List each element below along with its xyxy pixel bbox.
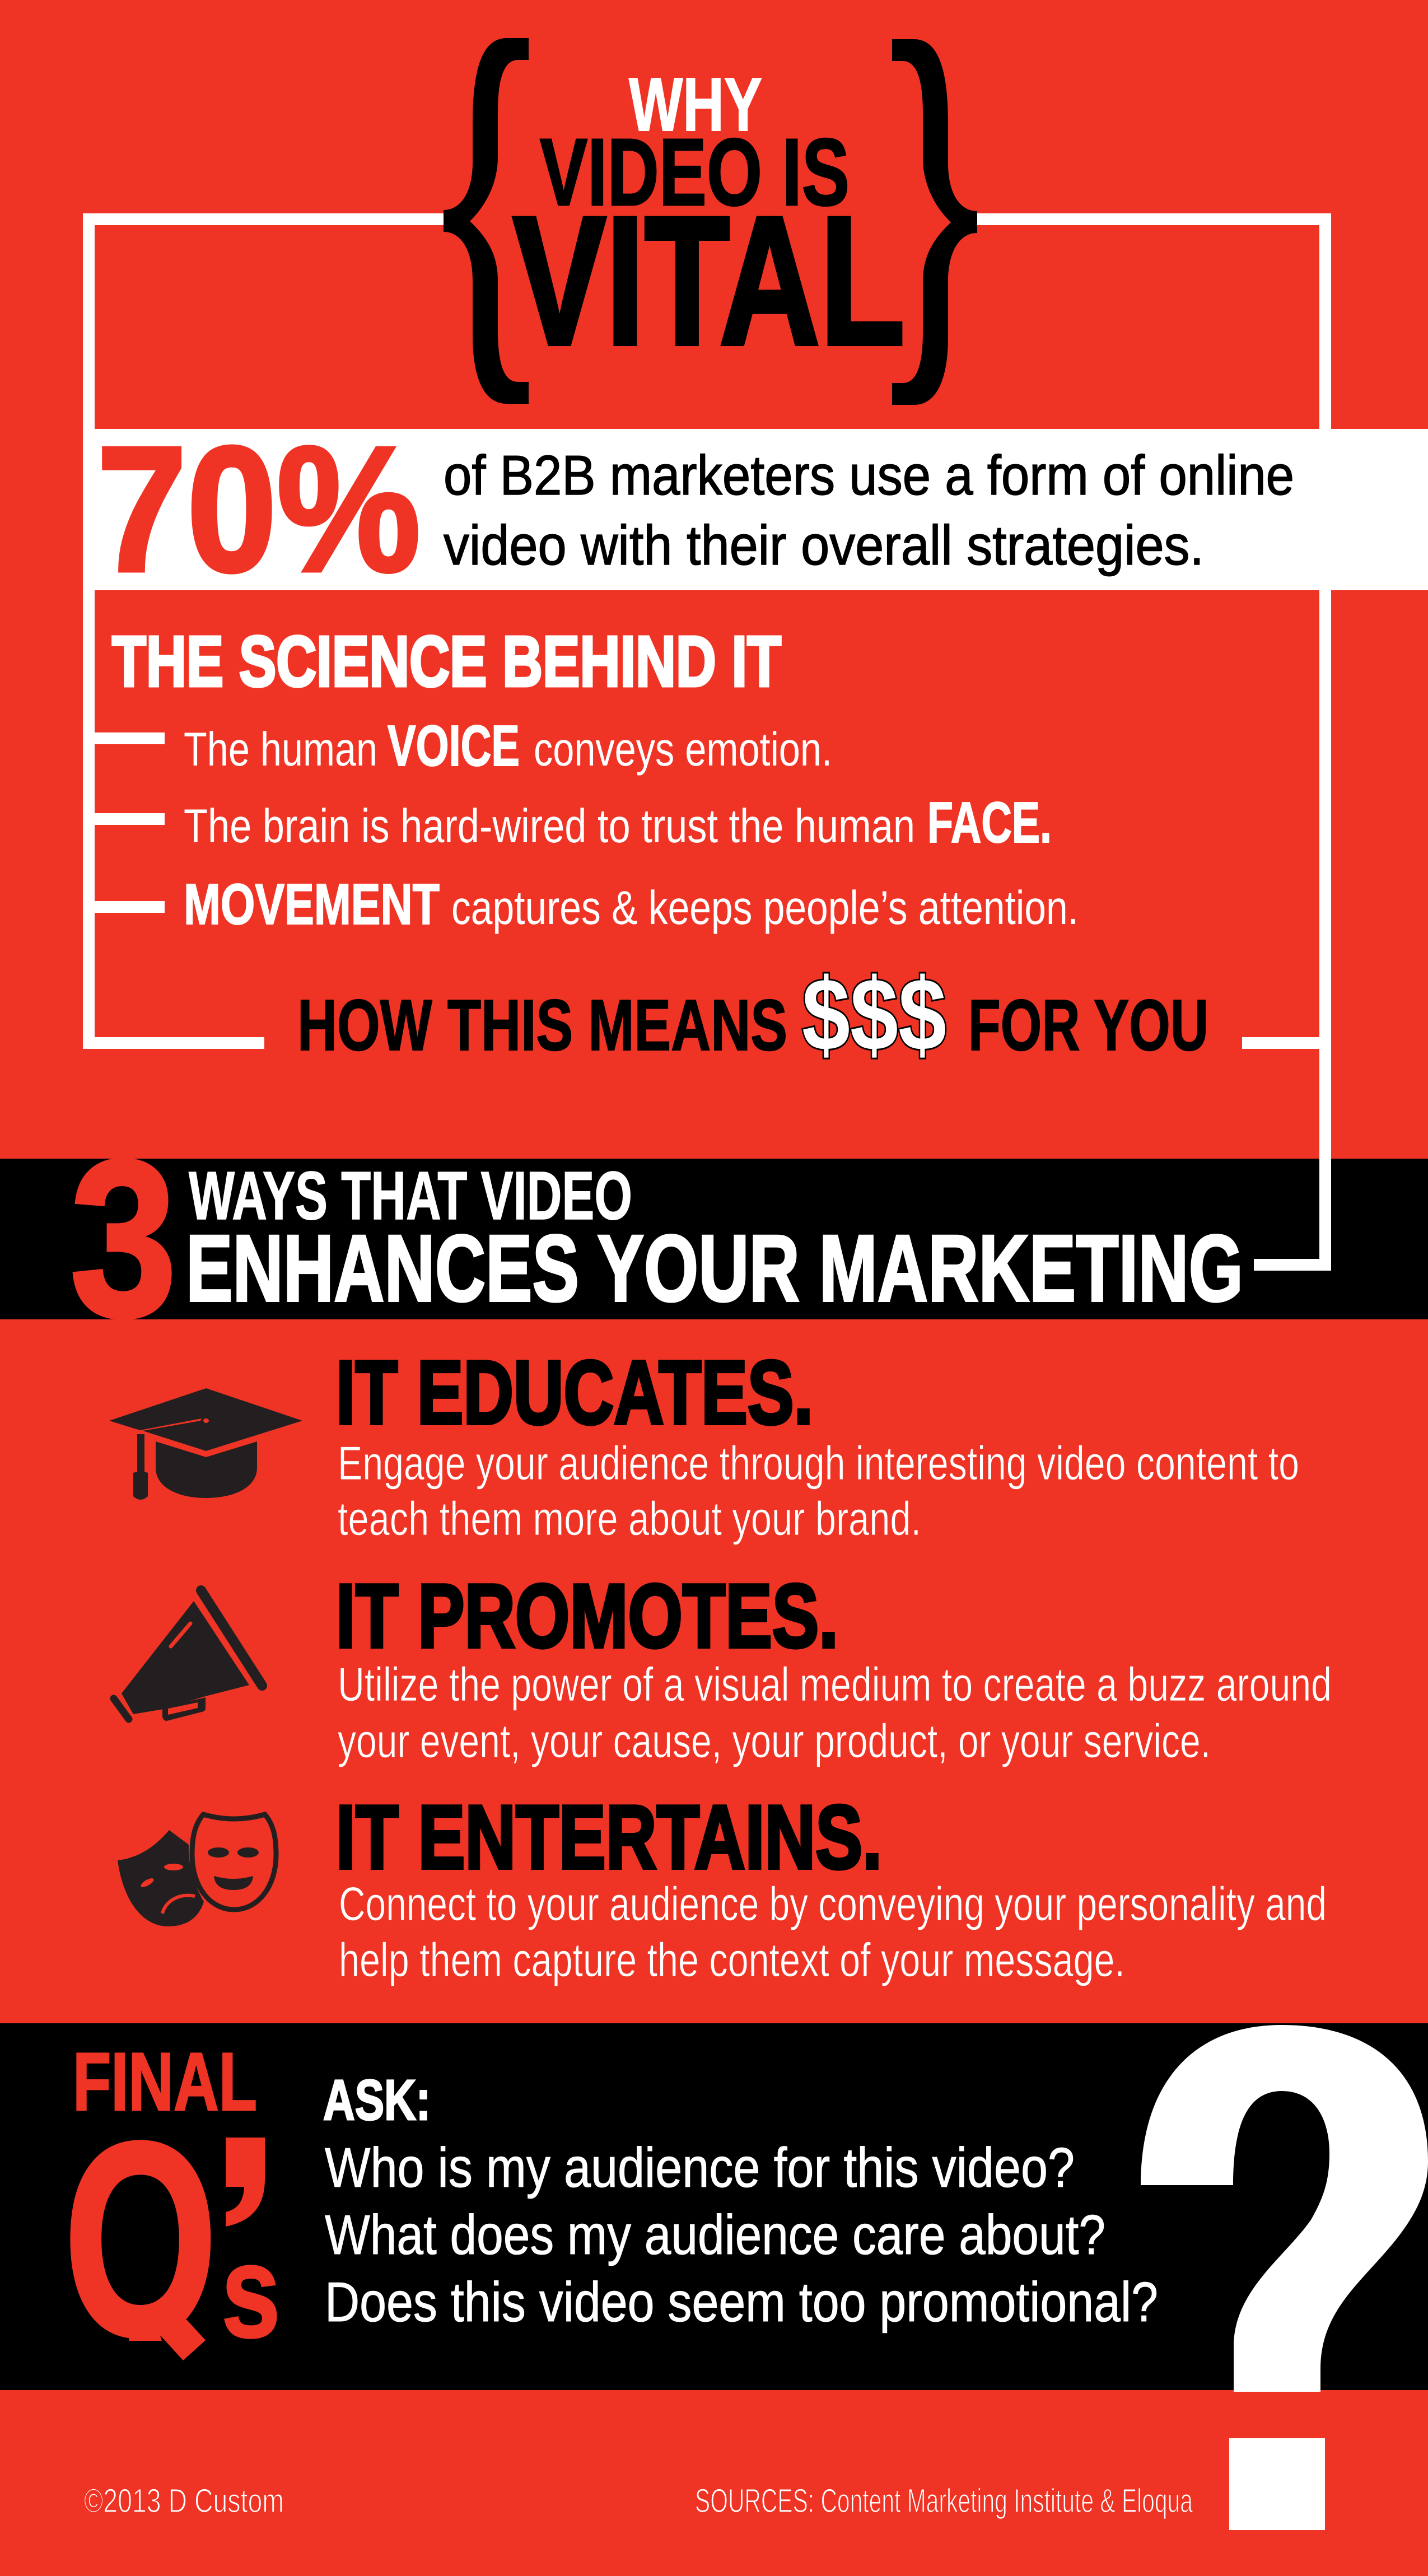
heading: final Q's: FINAL xyxy=(73,2036,257,2128)
list item: voice: conveys emotion. xyxy=(534,723,832,776)
heading: 3 ways that video enhances your marketing xyxy=(70,1114,1243,1363)
list item: voice: The human xyxy=(184,723,377,776)
icon: graduation cap xyxy=(109,1388,302,1500)
icon: left curly brace xyxy=(444,38,529,404)
body text xyxy=(338,1658,1332,1768)
list item: movement xyxy=(95,872,1079,936)
heading: IT EDUCATES. xyxy=(336,1342,813,1443)
icon: megaphone xyxy=(114,1590,262,1721)
footer: copyright: ©2013 D Custom xyxy=(84,2482,284,2519)
questions list xyxy=(323,2068,1158,2334)
section band: 3 ways black background xyxy=(0,1159,1428,1319)
icon: dollar signs: $$$ xyxy=(802,956,946,1072)
panel: final questions black background xyxy=(0,2023,1428,2390)
panel: the science behind it xyxy=(95,622,1079,936)
title xyxy=(444,38,977,405)
stat: 70 percent xyxy=(97,410,1294,609)
big number: 70% xyxy=(97,410,421,609)
title line: why: WHY xyxy=(629,62,762,147)
stat band: white background xyxy=(95,429,1428,590)
body text: teach them more about your brand. xyxy=(338,1492,921,1546)
questions list: ASK: xyxy=(323,2068,431,2132)
big numeral 3: 3 xyxy=(70,1114,177,1363)
list item: movement: captures & keeps people’s attention. xyxy=(451,881,1079,935)
list item: face: FACE. xyxy=(927,790,1052,855)
subheading: how this means money xyxy=(297,956,1208,1072)
body text xyxy=(338,1437,1299,1546)
block: it educates xyxy=(336,1342,1299,1546)
heading: THE SCIENCE BEHIND IT xyxy=(112,622,781,702)
heading line 1: WAYS THAT VIDEO xyxy=(189,1158,632,1234)
icon: giant question mark xyxy=(1141,2025,1428,2530)
body text xyxy=(339,1878,1327,1987)
body text: help them capture the context of your message. xyxy=(339,1934,1125,1987)
list item: face: The brain is hard-wired to trust the human xyxy=(184,800,915,853)
stat description xyxy=(444,444,1294,577)
block: it entertains xyxy=(336,1787,1327,1987)
icon: right curly brace xyxy=(892,39,977,405)
questions list: What does my audience care about? xyxy=(325,2204,1105,2266)
stat description: video with their overall strategies. xyxy=(444,514,1204,577)
title line: vital: VITAL xyxy=(513,179,905,383)
heading: final Q's: Q xyxy=(63,2084,218,2394)
frame: white outline connecting the sections xyxy=(83,213,1331,1049)
frame: right line running over the black band xyxy=(1254,213,1331,1271)
list item: movement: MOVEMENT xyxy=(184,872,440,936)
questions list: Does this video seem too promotional? xyxy=(325,2271,1158,2334)
list item: voice xyxy=(95,713,832,778)
questions list: Who is my audience for this video? xyxy=(325,2136,1075,2199)
title line: video is: VIDEO IS xyxy=(540,119,850,226)
icon: theatre masks xyxy=(118,1814,276,1926)
block: it promotes xyxy=(336,1566,1332,1768)
heading: IT PROMOTES. xyxy=(336,1566,838,1667)
subheading: how this means money: FOR YOU xyxy=(968,985,1208,1066)
stat description: of B2B marketers use a form of online xyxy=(444,444,1294,507)
list item: voice: VOICE xyxy=(388,713,520,778)
heading: final Q's: s xyxy=(221,2218,281,2365)
heading: IT ENTERTAINS. xyxy=(336,1787,882,1888)
footer: sources: SOURCES: Content Marketing Institute & Eloqua xyxy=(695,2482,1193,2519)
subheading: how this means money: HOW THIS MEANS xyxy=(297,985,787,1066)
